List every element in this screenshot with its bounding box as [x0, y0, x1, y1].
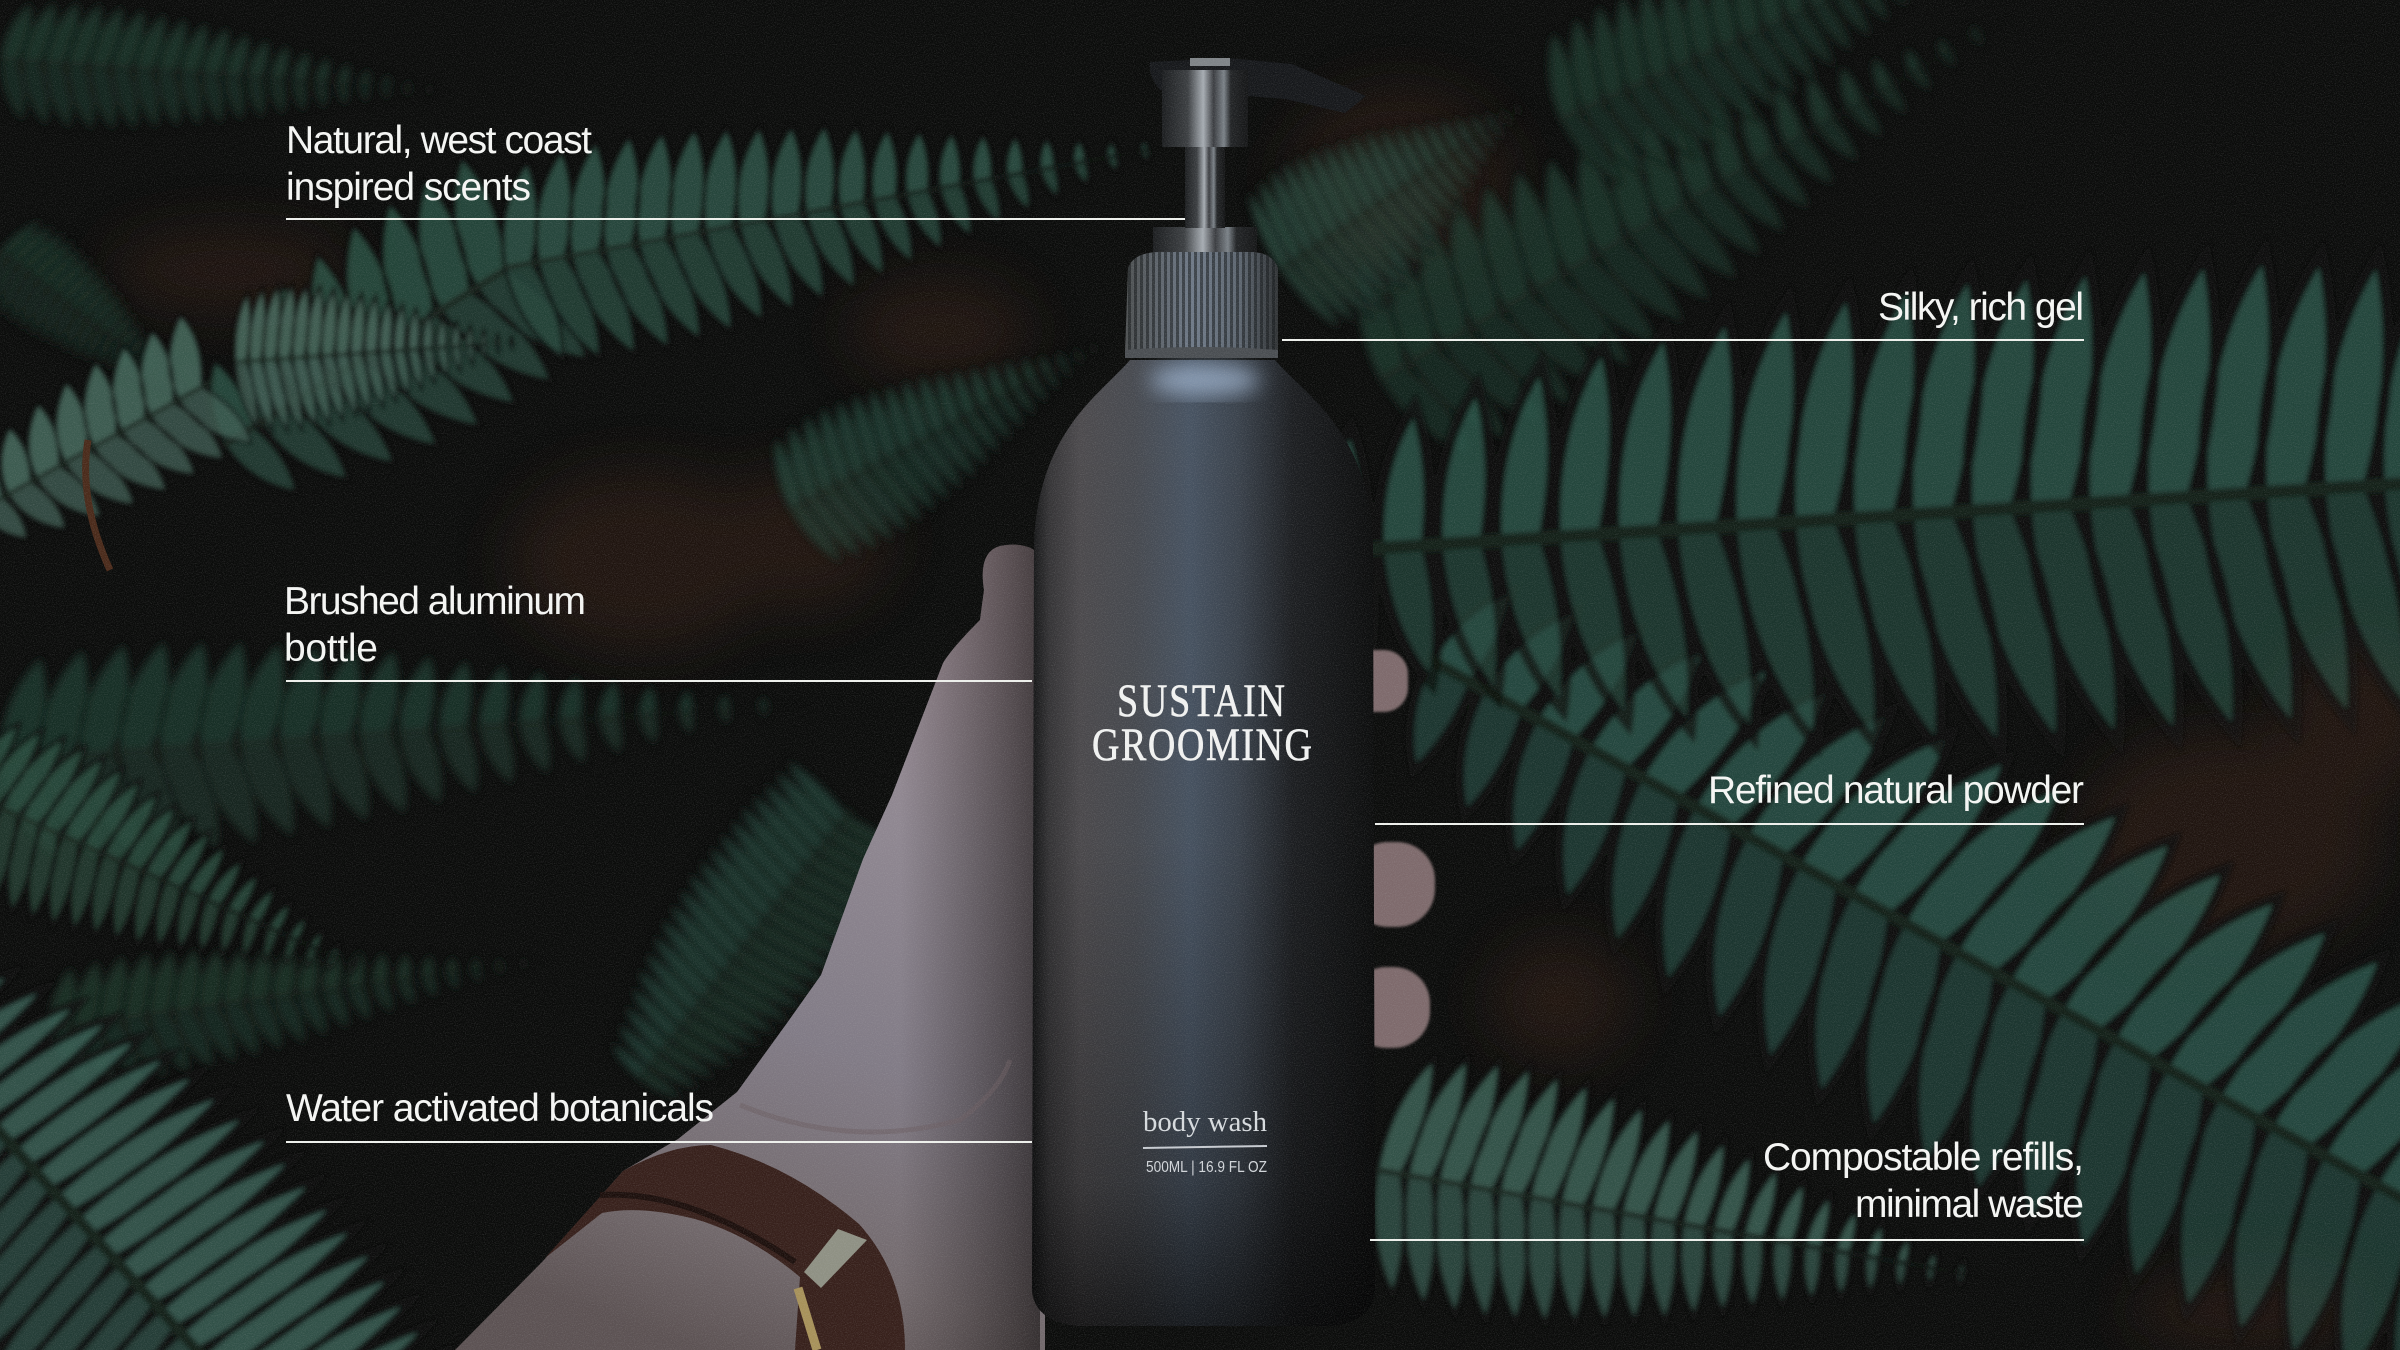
product name: body wash — [1143, 1106, 1267, 1138]
fern: left bright frond — [0, 314, 253, 574]
palm and thumb — [455, 545, 1045, 1350]
callout: bottle material: Brushed aluminum — [284, 580, 586, 623]
callout: bottle material — [284, 580, 1032, 681]
background ferns, out of focus — [0, 0, 2081, 1136]
callout: refills: Compostable refills, — [1763, 1136, 2084, 1179]
fern: left mid frond — [0, 708, 420, 1061]
callout: bottle material: bottle — [284, 627, 378, 670]
callout: botanicals: Water activated botanicals — [286, 1087, 714, 1130]
leather watch strap — [545, 1145, 905, 1350]
callout: scents: Natural, west coast — [286, 119, 592, 162]
pump head and spout — [1150, 58, 1366, 147]
bottle label — [1092, 676, 1312, 1176]
volume: 500ML | 16.9 FL OZ — [1146, 1159, 1267, 1176]
callout: powder: Refined natural powder — [1708, 769, 2084, 812]
callout: gel: Silky, rich gel — [1878, 286, 2084, 329]
brand name — [1092, 676, 1312, 771]
brand name: GROOMING — [1092, 720, 1312, 771]
pump stem — [1185, 140, 1225, 228]
fern: top left frond — [162, 156, 589, 545]
fern: large right frond — [1305, 237, 2400, 792]
brand name: SUSTAIN — [1117, 676, 1285, 727]
callout: refills: minimal waste — [1855, 1183, 2084, 1226]
fingers behind bottle — [1350, 650, 1435, 1048]
callout: scents — [286, 119, 1185, 219]
bottle body — [1032, 360, 1375, 1326]
pump bottle — [1032, 58, 1375, 1326]
fern: bottom left frond — [0, 873, 462, 1350]
fern: bottom centre frond — [1355, 1043, 2028, 1350]
callout: scents: inspired scents — [286, 166, 531, 209]
watch buckle — [798, 1229, 867, 1350]
threaded cap — [1125, 227, 1278, 358]
callout: refills — [1370, 1136, 2084, 1240]
hand holding the bottle — [455, 540, 1435, 1350]
fern: lower right frond — [1331, 481, 2400, 1350]
